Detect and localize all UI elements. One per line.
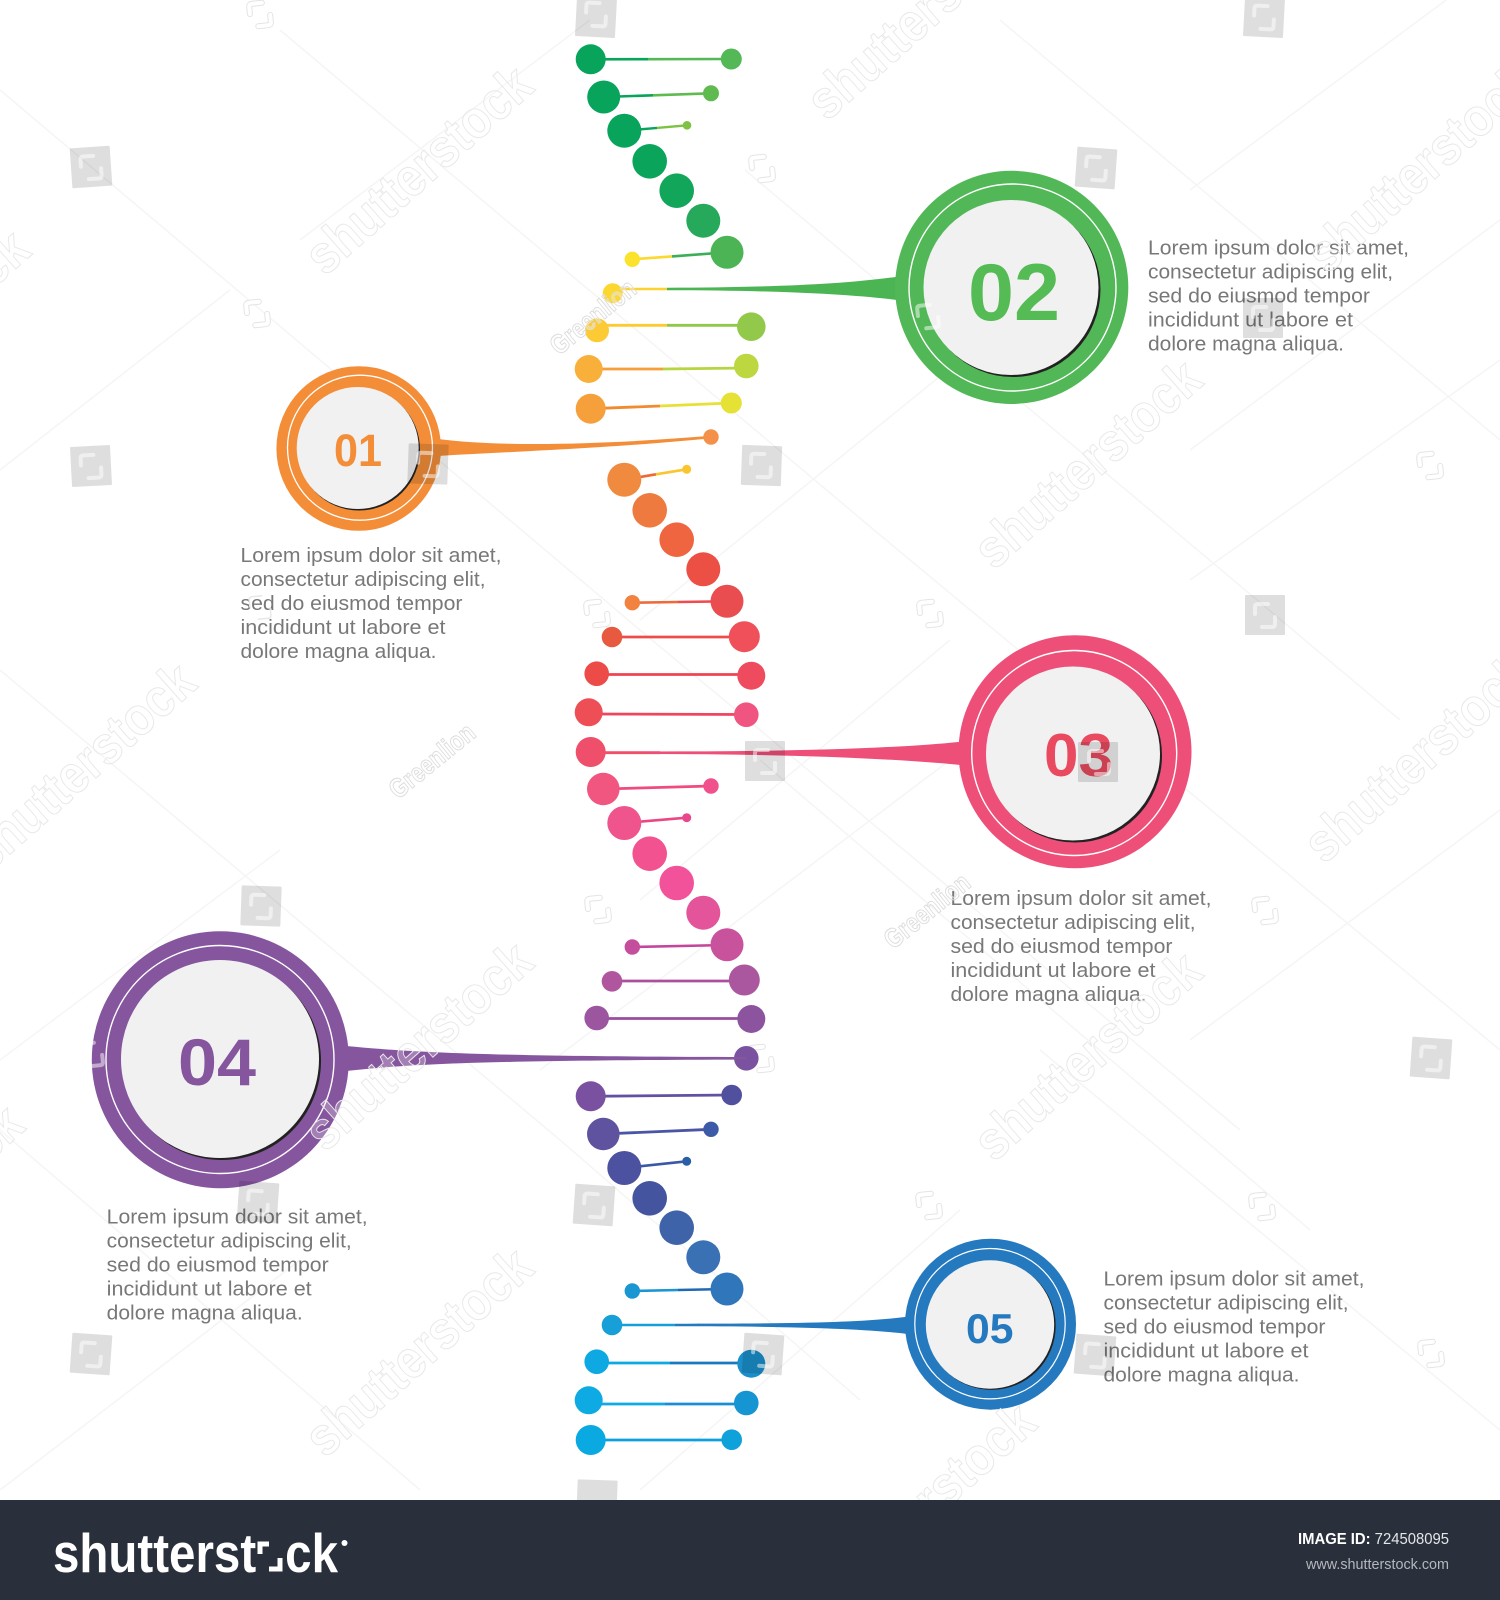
text block 05: consectetur adipiscing elit,	[1104, 1292, 1348, 1314]
callout 04	[92, 931, 746, 1188]
ring 01	[276, 366, 441, 531]
dna crossing balls blue	[632, 1181, 720, 1274]
text block 01: consectetur adipiscing elit,	[240, 568, 486, 591]
dna crossing balls orange	[632, 493, 720, 586]
text block 02: sed do eiusmod tempor	[1148, 284, 1370, 308]
text block 04	[107, 1206, 368, 1324]
number 02: 02	[968, 248, 1060, 338]
dna rung 20 right end	[734, 1046, 759, 1071]
watermark text: shutterstock	[293, 1235, 544, 1468]
watermark text: Greenlion	[544, 273, 642, 361]
dna rung 18	[602, 964, 760, 996]
text block 05: Lorem ipsum dolor sit amet,	[1104, 1268, 1364, 1290]
callout 03	[650, 635, 1192, 868]
text block 03: dolore magna aliqua.	[950, 983, 1146, 1006]
dna ball 01	[703, 429, 719, 445]
image id: IMAGE ID: 724508095	[1298, 1531, 1449, 1548]
text block 04: consectetur adipiscing elit,	[107, 1230, 352, 1252]
callout 05	[675, 1239, 1076, 1410]
dna rung 19	[584, 1005, 765, 1033]
number 05: 05	[966, 1305, 1014, 1352]
dna rung 9	[607, 463, 691, 497]
dna rung 13	[575, 698, 759, 727]
watermark text: shutterstock	[293, 53, 544, 286]
text block 05	[1104, 1268, 1364, 1386]
dna rung 6	[585, 312, 766, 342]
dna rung 8	[576, 392, 742, 424]
connector 03	[650, 742, 961, 765]
text block 02: dolore magna aliqua.	[1148, 332, 1344, 356]
text block 01: dolore magna aliqua.	[240, 640, 436, 663]
dna rung 14 left end	[576, 737, 660, 767]
dna rung 22	[587, 1118, 719, 1150]
footer bar	[0, 1500, 1500, 1600]
text block 04: Lorem ipsum dolor sit amet,	[107, 1206, 368, 1228]
dna rung 11	[602, 621, 760, 652]
dna rung 3	[607, 114, 691, 148]
dna rung 27	[575, 1386, 759, 1415]
dna rung 26	[584, 1349, 765, 1378]
connector 04	[346, 1046, 746, 1071]
dna rung 7	[575, 354, 759, 383]
watermark text: Greenlion	[878, 867, 976, 955]
disc 01	[297, 387, 419, 509]
dna rung 23	[607, 1151, 691, 1185]
text block 04: sed do eiusmod tempor	[107, 1254, 329, 1276]
text block 05: incididunt ut labore et	[1104, 1340, 1309, 1362]
ring 03	[958, 635, 1192, 868]
dna rung 2	[587, 80, 719, 114]
connector 05	[675, 1317, 907, 1334]
dna rung 17	[625, 928, 744, 961]
text block 01	[240, 544, 502, 663]
callout 01	[276, 366, 719, 531]
text block 02: consectetur adipiscing elit,	[1148, 260, 1393, 284]
text block 04: dolore magna aliqua.	[107, 1302, 303, 1324]
disc 03	[986, 666, 1160, 840]
text block 01: sed do eiusmod tempor	[240, 592, 463, 615]
watermark text: Greenlion	[383, 717, 481, 805]
text block 03: consectetur adipiscing elit,	[950, 911, 1196, 934]
disc 02	[924, 200, 1098, 375]
number 01: 01	[334, 425, 382, 476]
dna rung 4	[625, 236, 744, 269]
watermark corner marks	[80, 2, 1442, 1368]
dna crossing balls green	[632, 144, 720, 238]
text block 03: sed do eiusmod tempor	[950, 935, 1173, 958]
text block 02: Lorem ipsum dolor sit amet,	[1148, 236, 1409, 260]
text block 05: dolore magna aliqua.	[1104, 1364, 1300, 1386]
callout 02	[667, 171, 1128, 404]
ring 04	[92, 931, 349, 1188]
number 03: 03	[1044, 722, 1113, 789]
dna rung 25 left end	[602, 1315, 675, 1335]
disc 04	[121, 960, 319, 1158]
text block 01: incididunt ut labore et	[240, 616, 446, 639]
footer logo: shutterstock	[53, 1522, 338, 1584]
dna rung 28	[576, 1425, 742, 1455]
dna rung 24	[625, 1272, 744, 1306]
text block 02: incididunt ut labore et	[1148, 308, 1353, 332]
dna crossing balls pink	[632, 836, 720, 930]
dna rung 5 left end	[603, 283, 667, 303]
watermark text: shutterstock	[293, 929, 544, 1162]
dna rung 1	[576, 44, 742, 74]
number 04: 04	[178, 1025, 256, 1099]
dna helix	[575, 44, 766, 1455]
text block 04: incididunt ut labore et	[107, 1278, 312, 1300]
website url: www.shutterstock.com	[1305, 1557, 1449, 1573]
dna rung 16	[607, 806, 691, 840]
ring 05	[905, 1239, 1076, 1410]
text block 01: Lorem ipsum dolor sit amet,	[240, 544, 502, 567]
connector 02	[667, 277, 897, 300]
dna rung 15	[587, 773, 719, 805]
disc 05	[926, 1260, 1054, 1389]
text block 03	[950, 887, 1212, 1006]
ring 02	[895, 171, 1128, 404]
watermark text: shutterstock	[962, 939, 1213, 1172]
text block 05: sed do eiusmod tempor	[1104, 1316, 1326, 1338]
dna rung 21	[576, 1081, 742, 1111]
text block 03: Lorem ipsum dolor sit amet,	[950, 887, 1212, 910]
dna rung 12	[584, 661, 765, 690]
dna rung 10	[625, 585, 744, 618]
connector 01	[438, 436, 711, 456]
watermark text: shutterstock	[962, 347, 1213, 580]
text block 03: incididunt ut labore et	[950, 959, 1156, 982]
text block 02	[1148, 236, 1409, 356]
